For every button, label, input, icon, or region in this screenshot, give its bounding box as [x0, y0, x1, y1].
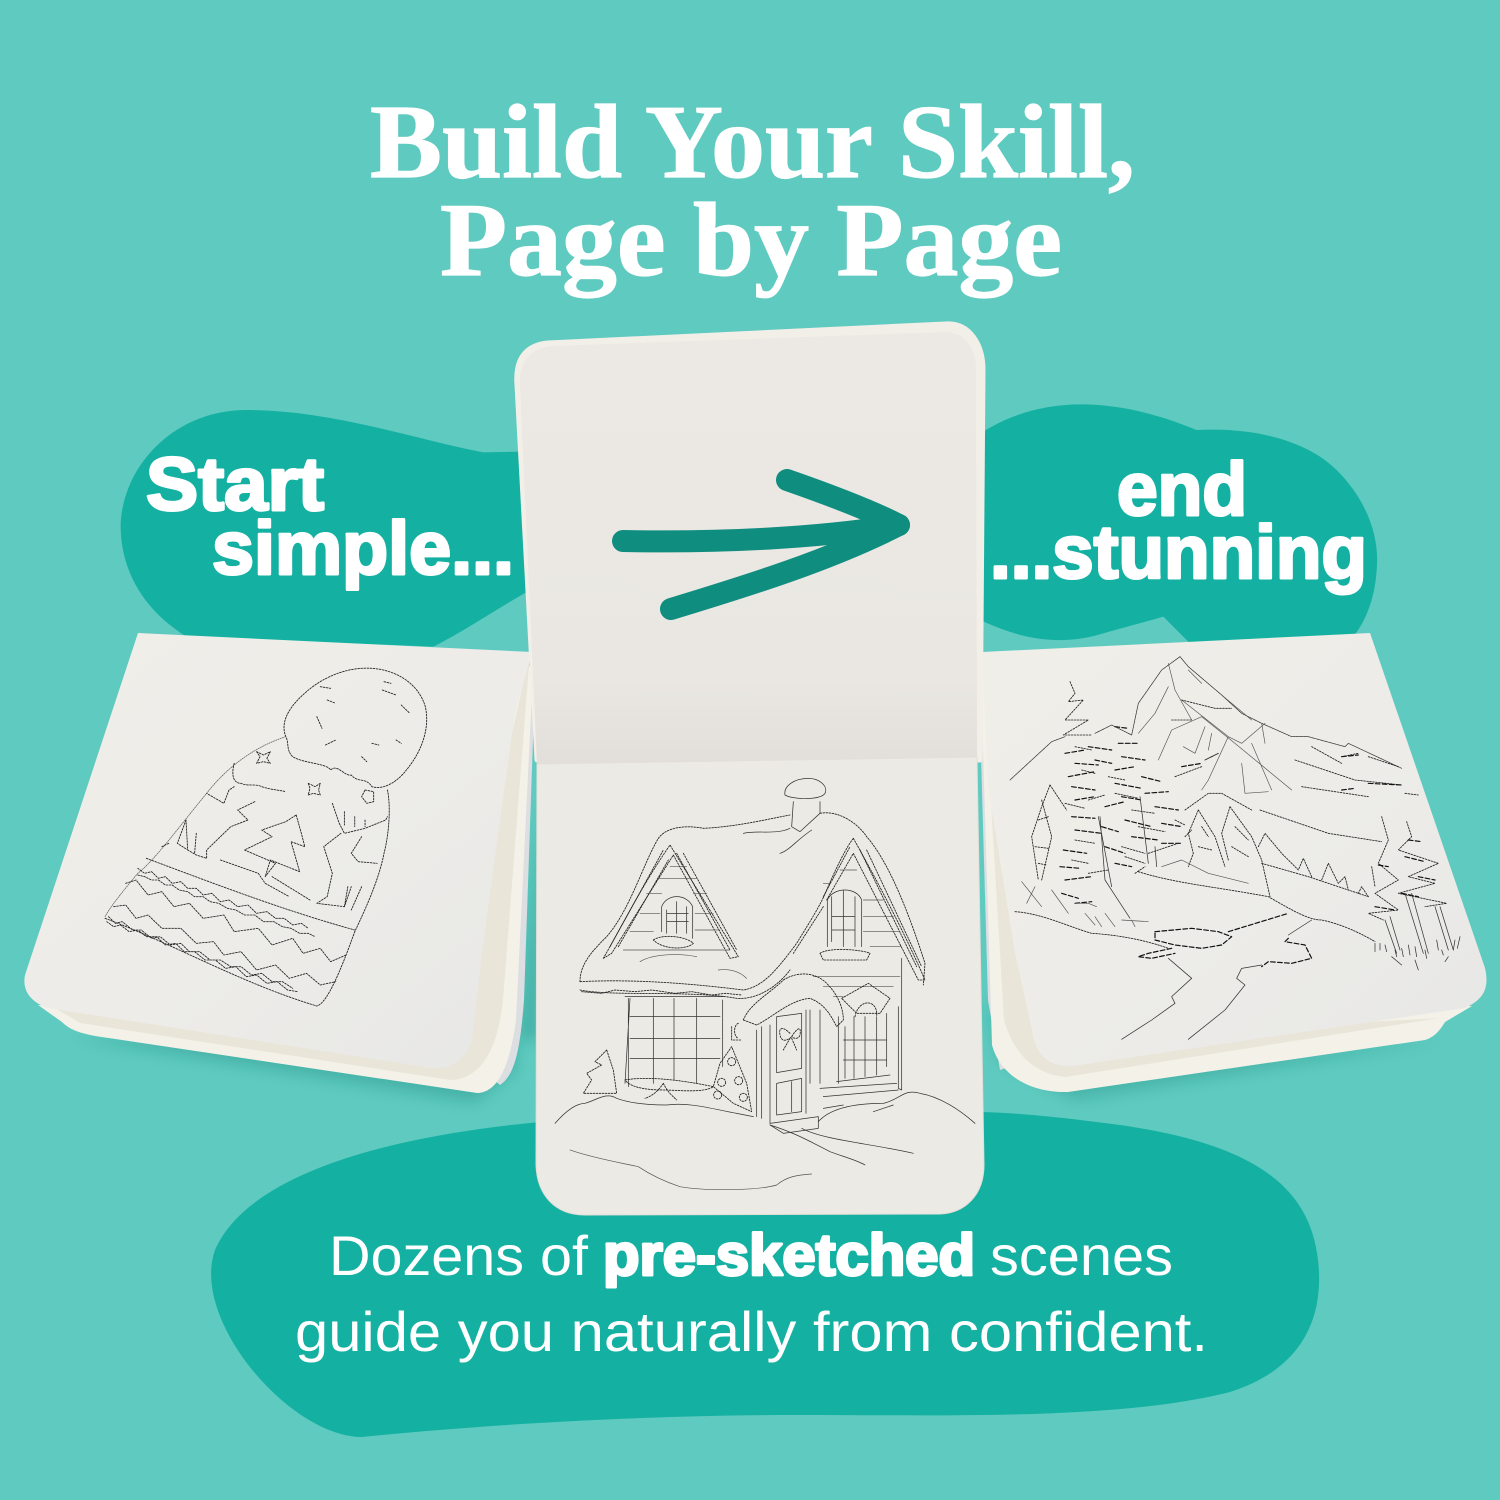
sketch: snowy cottage — [555, 778, 975, 1190]
upper page — [520, 332, 977, 764]
label: start simple: Start — [146, 442, 324, 526]
label: start simple — [146, 442, 514, 590]
label: start simple: simple... — [212, 506, 514, 590]
title — [370, 83, 1135, 298]
caption: guide you naturally from confident. — [295, 1300, 1208, 1363]
caption — [295, 1223, 1208, 1363]
label: end stunning: end — [1117, 447, 1247, 531]
blob: start simple background — [121, 410, 533, 647]
caption: scenes — [990, 1224, 1173, 1287]
title: Page by Page — [440, 181, 1062, 298]
caption: Dozens of — [329, 1224, 588, 1287]
caption: pre-sketched — [603, 1223, 975, 1288]
label: end stunning: ...stunning — [990, 510, 1367, 594]
blob: end stunning background — [973, 404, 1377, 643]
right sketchbook — [978, 633, 1486, 1100]
sketch: knitted hat — [105, 668, 427, 1006]
title: Build Your Skill, — [370, 83, 1135, 200]
label: end stunning — [990, 447, 1367, 594]
lower page — [536, 757, 984, 1215]
blob: bottom caption background — [211, 1112, 1319, 1437]
sketch: mountain landscape — [1010, 657, 1460, 1039]
left sketchbook — [24, 633, 540, 1103]
centre sketchbook — [517, 324, 984, 1215]
arrow — [623, 480, 899, 609]
